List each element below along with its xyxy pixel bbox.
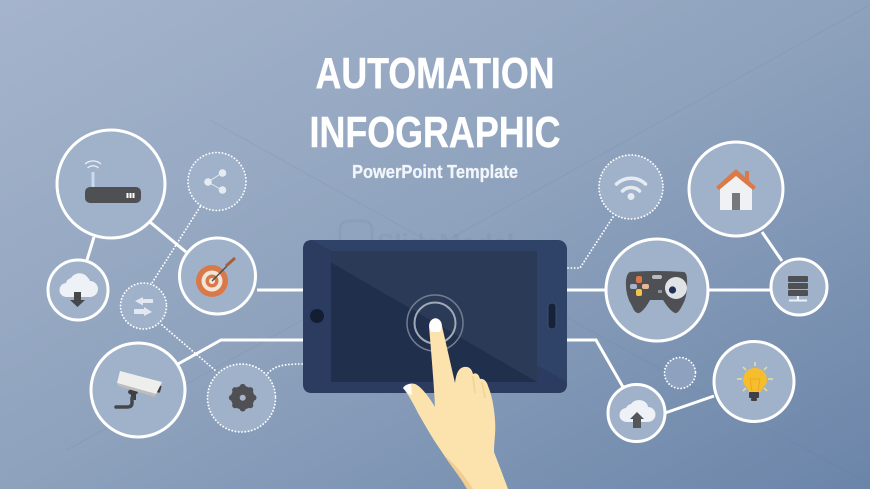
panel: home <box>689 142 783 236</box>
panel: camera <box>91 343 185 437</box>
dotted connectors <box>152 207 613 373</box>
icon: house <box>716 169 756 210</box>
title: INFOGRAPHIC <box>310 108 560 157</box>
icon: router <box>85 161 141 203</box>
nail <box>429 318 442 332</box>
icon: server <box>788 276 808 300</box>
panel: gamepad <box>606 239 708 341</box>
panel: bulb <box>714 342 794 422</box>
icon: security camera <box>116 371 162 407</box>
icon: transfer arrows <box>134 297 153 316</box>
icon: cloud download <box>59 273 98 307</box>
icon: share <box>204 169 226 194</box>
icon: gear <box>229 384 256 412</box>
panel: transfer arrows <box>120 283 166 329</box>
panel: target <box>180 238 256 314</box>
subtitle: PowerPoint Template <box>352 162 518 182</box>
icon: home button <box>548 303 556 329</box>
panel: download <box>48 260 108 320</box>
screen <box>331 251 537 382</box>
panel: share <box>188 152 246 210</box>
title: AUTOMATION <box>316 49 554 98</box>
icon: cloud upload <box>619 400 656 428</box>
tablet <box>303 240 567 393</box>
watermark <box>340 221 514 258</box>
hand <box>403 318 508 489</box>
title <box>310 49 560 182</box>
panel: gear <box>208 364 276 432</box>
solid connectors <box>87 222 782 413</box>
watermark: SlideModel <box>377 228 514 258</box>
decorative dotted circle <box>664 358 696 388</box>
panel: upload <box>608 384 665 442</box>
touch rings <box>407 295 463 351</box>
icon: gamepad <box>626 271 687 313</box>
icon: camera dot <box>310 309 324 323</box>
panel: server <box>771 259 827 315</box>
icon: wifi <box>616 178 646 200</box>
panel: wifi <box>599 155 663 219</box>
icon: target <box>196 258 235 297</box>
panel: router <box>57 130 165 238</box>
icon: light bulb <box>737 362 773 401</box>
